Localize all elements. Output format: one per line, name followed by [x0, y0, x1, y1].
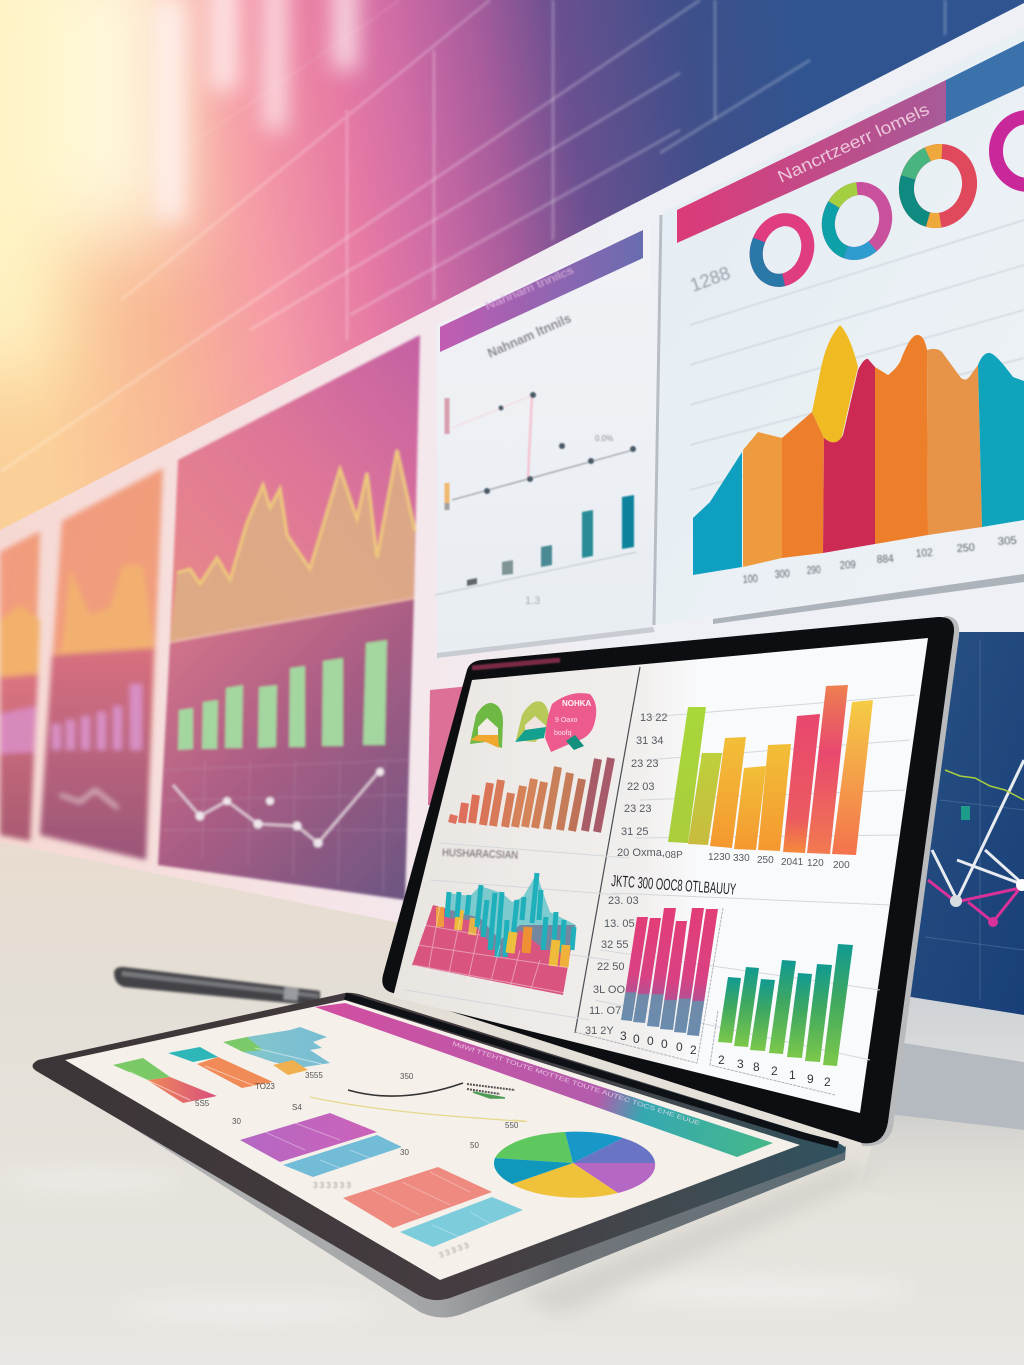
lower left axis labels: 32 55	[601, 939, 629, 951]
axis labels: 884	[876, 553, 894, 566]
axis labels	[742, 535, 1017, 586]
magenta green header band	[315, 1003, 773, 1157]
floor surface	[0, 840, 1024, 1365]
lower axis numbers: 300002	[620, 1029, 697, 1057]
tablet axis labels: 13 22	[640, 712, 668, 724]
small captions: 550	[505, 1121, 519, 1130]
axis labels: 300	[774, 568, 790, 581]
panel left divider	[654, 215, 661, 625]
tablet axis labels: 250	[757, 855, 774, 866]
lower left axis labels: 3L OO	[593, 984, 625, 996]
lower flat tablet	[32, 993, 875, 1318]
noisy pink teal chart	[412, 873, 576, 995]
upper area chart panel	[170, 335, 420, 642]
tablet axis labels: 2041	[781, 857, 804, 868]
tablet axis labels: 31 25	[621, 826, 649, 838]
pie chart	[494, 1132, 655, 1198]
big number: 1288	[688, 263, 733, 296]
small captions: 3555	[305, 1071, 323, 1080]
donut 3	[897, 143, 979, 229]
tablet axis labels: 120	[807, 858, 824, 869]
donut 2	[819, 180, 895, 262]
pink title band	[677, 80, 946, 243]
tablet axis labels: 31 34	[636, 735, 664, 747]
header band	[440, 230, 643, 352]
orange small bars	[452, 758, 611, 832]
soft shadow	[520, 1165, 875, 1315]
lower left axis labels: 11. O7	[589, 1005, 621, 1017]
tablet axis labels: 330	[733, 853, 750, 864]
panel bottom edge	[437, 627, 655, 658]
pink blue bars	[621, 908, 718, 1036]
tablet silver edge	[850, 616, 959, 1146]
blurred axis captions: 3 3 3 3 3	[438, 1241, 470, 1260]
line sketch chart	[310, 1083, 527, 1121]
chart grid lines	[690, 220, 1024, 490]
line and dots chart: 1.3	[525, 595, 540, 607]
panel: far-left dashboard	[0, 531, 40, 841]
axis labels: 290	[806, 564, 821, 577]
icon: pink speech bubble: NOHKA	[562, 699, 592, 708]
tablet axis labels: 200	[833, 860, 850, 871]
teal bars	[467, 495, 634, 586]
upright tablet	[382, 616, 959, 1146]
icon: pink speech bubble: 9 Oaxo	[555, 717, 578, 724]
icon: pink speech bubble: boofq	[554, 730, 572, 737]
body	[32, 993, 846, 1300]
axis labels: 100	[742, 573, 758, 586]
floor streaks	[0, 1170, 910, 1322]
donut 1	[748, 212, 816, 288]
icon: pink speech bubble	[545, 693, 596, 752]
lower left axis labels: 13. 05	[604, 918, 635, 930]
panel: navy network chart	[880, 632, 1024, 1015]
lower chart heading: JKTC 300 OOC8 OTLBAUUY	[611, 873, 737, 899]
axis labels: 250	[956, 542, 975, 555]
panel: large right white dashboard	[654, 28, 1024, 625]
lower axis numbers	[620, 1029, 831, 1089]
small captions	[195, 1071, 519, 1157]
panel bottom edge	[713, 574, 1024, 624]
screen grid lines	[405, 695, 915, 1060]
green bars	[718, 944, 853, 1066]
blurred heading: Nahnam ltnnils	[485, 310, 573, 361]
rainbow bar chart	[668, 685, 873, 855]
small captions: TO23	[255, 1082, 275, 1091]
bezel red reflection	[472, 660, 560, 668]
header band text: Nahnam tnnilcs	[483, 264, 576, 313]
small captions: 30	[400, 1148, 409, 1157]
tablet screen	[393, 638, 928, 1113]
lens glare	[0, 0, 357, 380]
small captions: 5S5	[195, 1099, 210, 1108]
tablet axis labels: 1230	[708, 852, 731, 863]
panel: lower pink panel behind tablet	[428, 686, 470, 805]
title text: Nancrtzeerr lomels	[775, 100, 932, 187]
lower axis numbers: 2382192	[718, 1053, 831, 1089]
wall grid lines	[0, 0, 945, 472]
right floor grey band	[880, 1040, 1024, 1130]
wall white frame	[0, 3, 1024, 925]
purple blue band chart	[240, 1113, 402, 1177]
icon: green arch bubble	[470, 703, 503, 748]
wall base strip	[880, 992, 1024, 1062]
panel: middle white dashboard	[435, 225, 655, 658]
icon: lime arch bubble	[515, 701, 549, 742]
left chart heading: HUSHARACSIAN	[442, 847, 518, 862]
tablet axis labels: 23 23	[624, 803, 652, 815]
blurred axis captions: 3 3 3 3 3 3	[313, 1181, 351, 1190]
line and dots chart	[435, 392, 637, 607]
axis labels: 102	[915, 547, 933, 560]
small captions: 30	[232, 1117, 241, 1126]
lower left axis labels	[585, 895, 639, 1037]
tablet axis labels: 22 03	[627, 781, 655, 793]
lower left axis labels: 22 50	[597, 961, 625, 973]
panel: third dashboard with area and bars	[158, 335, 420, 900]
tablet body	[382, 617, 954, 1143]
small captions: 50	[470, 1141, 479, 1150]
chart axis frames	[575, 908, 835, 1095]
line and dots chart: 0.0%	[595, 434, 613, 443]
small captions: 350	[400, 1072, 414, 1081]
axis labels: 305	[997, 535, 1017, 548]
pen	[114, 967, 320, 1006]
hinge dark edge	[345, 996, 838, 1145]
screen divider	[575, 667, 640, 1033]
blurred axis captions	[313, 1181, 470, 1260]
small captions: S4	[292, 1103, 302, 1112]
lower left axis labels: 31 2Y	[585, 1025, 614, 1037]
right floor shading	[860, 1113, 1024, 1230]
panel: second dashboard	[40, 468, 163, 860]
lower bars panel	[158, 598, 414, 900]
lower left axis labels: 23. 03	[608, 895, 639, 907]
donut 4 cropped	[996, 117, 1024, 185]
tablet axis labels: 23 23	[631, 758, 659, 770]
tablet axis labels: 08P	[665, 850, 683, 861]
multicolour area chart	[693, 325, 1024, 575]
tablet axis labels: 20 Oxma,	[617, 847, 665, 859]
salmon teal band chart	[343, 1167, 523, 1247]
screen	[65, 1000, 800, 1280]
blue title band	[946, 41, 1024, 122]
tablet axis labels	[617, 712, 850, 871]
silver edge	[33, 1060, 846, 1318]
axis labels: 209	[839, 559, 856, 572]
top stacked bands	[113, 1027, 330, 1103]
header text: MdWf TTEHT TOUTE MOTTEE TOUTE AUTEC TOCS EHE EUUE	[451, 1041, 701, 1127]
